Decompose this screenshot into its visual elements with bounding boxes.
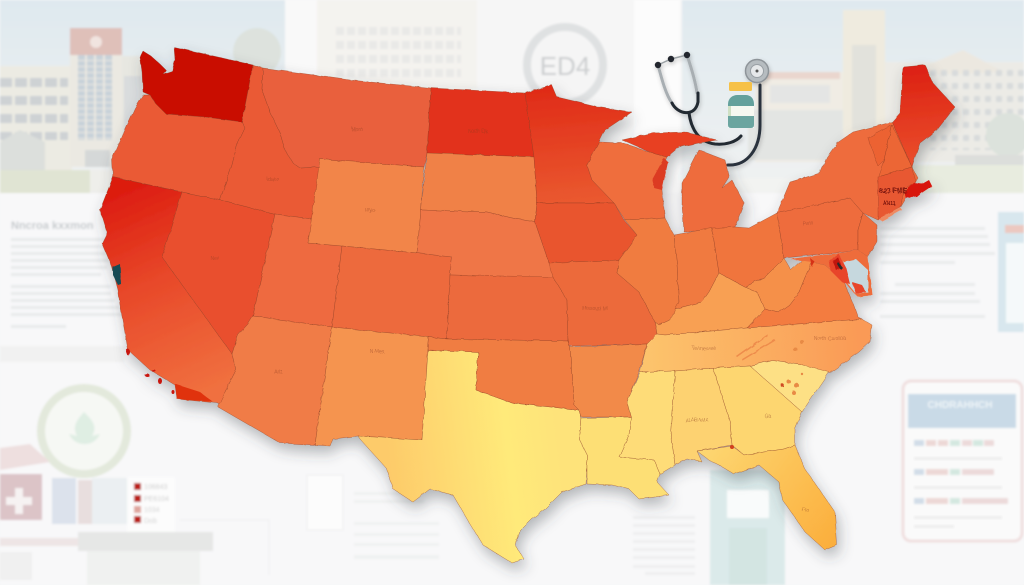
state: New Jersey [858, 213, 877, 257]
city markers [730, 340, 804, 449]
state labels: Ga [765, 414, 772, 420]
icon: stethoscope [655, 52, 768, 165]
North Carolina mountain streaks [737, 335, 775, 360]
Chesapeake detail [790, 250, 872, 297]
state: Utah [253, 214, 342, 327]
panel: hospital photo top left [0, 0, 285, 193]
state: Nevada [162, 192, 275, 354]
legend card: 1034 [144, 507, 160, 514]
icon: clinic building [0, 444, 128, 580]
panel: schedule card: CHDRAHHCH [928, 400, 992, 411]
map text: Massachusetts blot: 823 FME [879, 188, 908, 195]
state: North Carolina and Tennessee band [640, 319, 872, 373]
state labels: North Dk [468, 129, 488, 135]
state: Oregon [112, 95, 245, 200]
state: Idaho [220, 65, 320, 219]
chart outline bottom centre [180, 475, 343, 575]
state labels: N Mex [370, 349, 385, 355]
legend card [127, 477, 175, 535]
state: Montana [262, 68, 431, 168]
state: Minnesota [525, 85, 632, 203]
state: New Hampshire outline [878, 125, 912, 177]
heading: background article title: Nncroa kxxmon [11, 220, 94, 232]
state: Wisconsin [587, 142, 667, 220]
state: California [100, 177, 236, 405]
panel: emblem top centre: ED4 [540, 51, 590, 81]
panel: building photo top centre [285, 0, 477, 193]
state: Washington [140, 47, 253, 122]
teal bay patch [113, 264, 121, 285]
state: New York [777, 122, 918, 220]
state: Iowa [535, 203, 637, 263]
state: Arkansas [570, 344, 647, 417]
state labels: Idaho [267, 177, 279, 183]
state labels: Missouri MI [582, 306, 608, 312]
panel: emblem top centre [477, 0, 682, 193]
state: Indiana [674, 228, 719, 309]
state: southern California highlight [175, 384, 213, 402]
state: Georgia [713, 366, 802, 455]
text block: background bottom right [633, 516, 695, 575]
state: Vermont outline [868, 125, 892, 166]
podium [78, 532, 213, 585]
islands off California [126, 349, 174, 394]
state: Massachusetts and Connecticut [878, 167, 916, 220]
state: New Mexico [315, 327, 429, 446]
state: Colorado [332, 246, 452, 339]
state: Kentucky [655, 273, 765, 335]
state: Michigan lower peninsula [682, 150, 744, 232]
divider band left [0, 346, 125, 362]
state labels: Nev [211, 256, 220, 262]
text block: background bottom centre [354, 492, 439, 559]
state: West Virginia [745, 257, 812, 312]
text block: background article right [880, 227, 995, 318]
state: Illinois [617, 218, 679, 325]
map of the United States [100, 47, 955, 563]
icon: green seal [41, 388, 127, 474]
state: Louisiana [579, 417, 669, 499]
legend card: 106843 [144, 484, 167, 491]
legend card: Dob [144, 518, 157, 525]
state: Mississippi [619, 371, 675, 474]
state: Texas [358, 350, 587, 563]
state labels [211, 127, 846, 514]
state labels: ALABAMA [685, 418, 709, 424]
panel: teal building bottom [710, 470, 785, 585]
panel: blue card right [998, 212, 1024, 332]
map text: Rhode Island blot: AN11 [883, 201, 896, 207]
state: South Dakota [421, 153, 537, 222]
state: Alabama [671, 368, 732, 465]
state: Maine [892, 65, 955, 167]
state labels: Fla [803, 508, 810, 514]
state: Ohio [712, 213, 784, 287]
state: Michigan upper peninsula [622, 132, 717, 157]
state labels: Tennessee [692, 346, 716, 352]
panel: schedule card [903, 381, 1022, 541]
state: Oklahoma [428, 337, 579, 410]
text block: background article left [11, 238, 123, 328]
icon: medicine bottle [728, 82, 754, 128]
panel: hospital photo top right [682, 0, 1024, 193]
Cape Cod [904, 180, 932, 198]
state labels: North Carolina [814, 336, 846, 342]
state: Missouri [549, 260, 657, 346]
state labels: Wyo [365, 208, 375, 214]
Green Bay red patch [652, 158, 668, 190]
legend card: PE6104 [144, 496, 169, 503]
state: North Dakota [427, 88, 534, 157]
state: Arizona [218, 316, 332, 445]
state: Pennsylvania [777, 198, 863, 258]
state: Virginia [747, 262, 862, 328]
state: Nebraska [417, 210, 562, 278]
state labels: Ariz [274, 369, 283, 375]
state: Kansas [447, 275, 568, 341]
state: South Carolina [750, 360, 829, 412]
Long Island [878, 207, 902, 221]
state labels: Mont [351, 127, 363, 133]
state: Florida [697, 445, 837, 550]
state labels: Penn [802, 221, 814, 227]
state: Wyoming [308, 159, 424, 253]
